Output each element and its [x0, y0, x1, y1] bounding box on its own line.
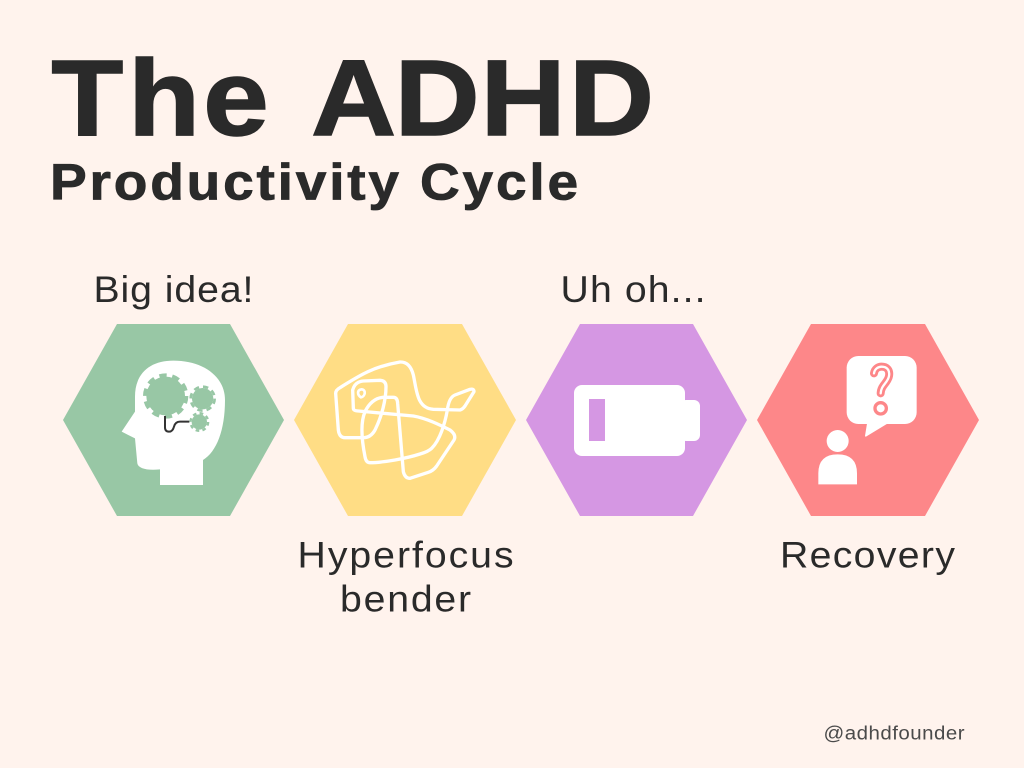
panel: big idea hexagon [63, 324, 284, 516]
icon: person with question [818, 356, 917, 484]
credit: @adhdfounder [824, 723, 965, 744]
icon: tangled line [336, 362, 474, 478]
icon: head with gears [122, 361, 225, 485]
title: The ADHD [51, 37, 654, 158]
label: recovery: Recovery [780, 535, 955, 576]
label: hyperfocus bender: bender [340, 579, 471, 620]
subtitle: Productivity Cycle [50, 154, 578, 211]
label: hyperfocus bender [298, 535, 514, 620]
label: big idea: Big idea! [93, 269, 253, 311]
icon: low battery [574, 385, 700, 456]
panel: uh oh hexagon [526, 324, 747, 516]
label: uh oh: Uh oh... [561, 269, 706, 311]
label: hyperfocus bender: Hyperfocus [298, 535, 514, 576]
panel: recovery hexagon [757, 324, 979, 516]
panel: hyperfocus hexagon [294, 324, 516, 516]
